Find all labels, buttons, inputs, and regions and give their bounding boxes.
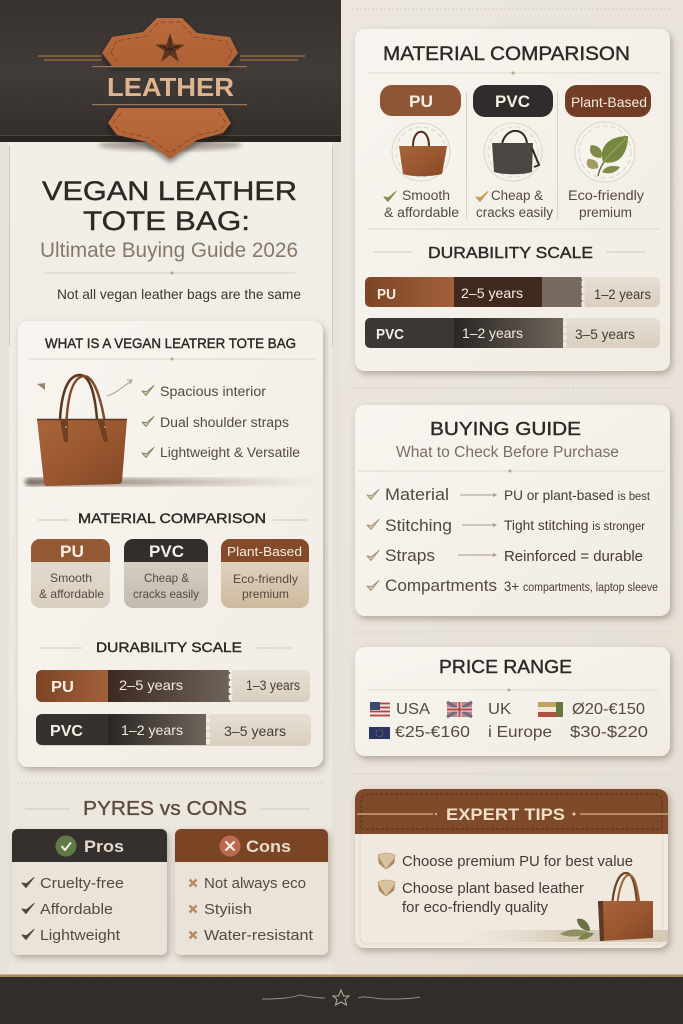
- icon: UK flag: [447, 702, 472, 717]
- icon: small tote bag: [598, 873, 653, 941]
- subheading: What to Check Before Purchase: [396, 444, 619, 461]
- tips header: [355, 789, 668, 834]
- footer ornament: [262, 990, 420, 1005]
- bar: PU durability: PU: [51, 679, 74, 696]
- icon: shield 1: [378, 853, 395, 869]
- feature list: Lightweight & Versatile: [160, 445, 300, 460]
- heading: PRICE RANGE: [439, 657, 572, 677]
- row: compartments: Compartments: [385, 577, 497, 595]
- heading: BUYING GUIDE: [430, 418, 581, 439]
- icon: red cross: [220, 836, 240, 856]
- bar: PU durability: 2–5 years: [119, 677, 183, 693]
- tip text 2: [402, 881, 584, 916]
- panel: price range: i Europe: [488, 724, 552, 741]
- card: PU: PU: [60, 543, 84, 561]
- PU description: Smooth: [402, 188, 450, 203]
- cons list: Water-resistant: [204, 927, 314, 944]
- tagline: Not all vegan leather bags are the same: [57, 286, 301, 302]
- PU description: [384, 188, 459, 220]
- panel: price range: USA: [396, 701, 430, 718]
- card: PU: Smooth: [50, 571, 92, 585]
- bar: PVC durability: PVC: [50, 723, 83, 740]
- row: compartments: compartments, laptop sleeve: [523, 582, 658, 594]
- row: stitching: Tight stitching is stronger: [504, 517, 645, 533]
- panel: price range: $30-$220: [570, 724, 648, 741]
- row: material: [367, 486, 651, 504]
- tip text 1: Choose premium PU for best value: [402, 854, 633, 870]
- bar: PVC durability: 3–5 years: [224, 723, 286, 739]
- row: compartments: 3+: [504, 578, 519, 594]
- row: stitching: Stitching: [385, 517, 452, 535]
- bar: PVC durability: 3–5 years: [575, 326, 635, 342]
- tips header: EXPERT TIPS: [446, 806, 565, 824]
- pill: PVC: PVC: [495, 92, 530, 111]
- panel: what is a vegan leather tote bag: [18, 321, 323, 767]
- panel: price range: UK: [488, 701, 511, 718]
- panel: price range: €25-€160: [395, 724, 470, 741]
- bar: PVC durability: 1–2 years: [121, 722, 183, 738]
- pros list: Lightweight: [40, 927, 121, 944]
- card: PU: [31, 539, 110, 608]
- row: material: PU or plant-based is best: [504, 487, 651, 503]
- card: PVC: Cheap &: [144, 571, 189, 585]
- panel: buying guide: [355, 405, 670, 616]
- panel: cons: Cons: [246, 837, 291, 856]
- card: plant-based: Eco-friendly: [233, 572, 298, 586]
- icon: striped flag: [538, 702, 563, 717]
- icon: leaf in circle: [575, 122, 635, 182]
- panel: pros: Pros: [84, 837, 124, 856]
- plant-based description: premium: [579, 205, 632, 220]
- pros list: [22, 875, 124, 944]
- cons list: [190, 875, 314, 944]
- pill: plant-based: [565, 85, 651, 117]
- title: [42, 176, 297, 236]
- panel: pros: [12, 829, 167, 955]
- row: stitching: [367, 517, 645, 535]
- PVC description: cracks easily: [476, 205, 553, 220]
- heading: durability scale: DURABILITY SCALE: [428, 245, 593, 262]
- panel: expert tips: [355, 789, 668, 948]
- bar: PU durability: 1–2 years: [594, 286, 651, 302]
- card: PVC: cracks easily: [133, 587, 199, 601]
- card: PVC: PVC: [149, 543, 184, 561]
- panel: price range: Ø20-€150: [572, 701, 645, 718]
- feature list: Spacious interior: [160, 384, 267, 399]
- card: plant-based: [221, 539, 309, 608]
- heading: what is: WHAT IS A VEGAN LEATRER TOTE BAG: [45, 336, 296, 351]
- icon: green check: [56, 836, 76, 856]
- panel: cons: [175, 829, 328, 955]
- footer band: [0, 974, 683, 1024]
- heading: material comparison: MATERIAL COMPARISON: [78, 510, 266, 526]
- icon: brown bag in circle: [392, 123, 450, 181]
- heading: pyres vs cons: PYRES vs CONS: [83, 797, 247, 820]
- PVC description: [476, 188, 553, 220]
- icon: EU flag: [369, 727, 390, 739]
- pill: PU: [380, 85, 461, 116]
- bar: PU durability: [36, 667, 310, 707]
- feature list: Dual shoulder straps: [160, 415, 289, 430]
- cons list: Styiish: [204, 901, 252, 918]
- ground strip: [460, 930, 668, 942]
- icon: leaves: [560, 919, 594, 940]
- arrow to bag features: [107, 380, 132, 396]
- card: PU: & affordable: [39, 587, 104, 601]
- panel: material comparison: [355, 29, 670, 371]
- row: straps: Straps: [385, 547, 435, 565]
- icon: tote bag: [25, 375, 322, 486]
- feature list: [142, 384, 300, 460]
- plant-based description: [568, 188, 644, 220]
- header leather band: [0, 0, 341, 142]
- icon: dark bag in circle: [484, 123, 542, 181]
- bar: PVC durability: PVC: [376, 327, 404, 343]
- pill: PVC: [473, 85, 553, 117]
- row: straps: Reinforced = durable: [504, 549, 643, 565]
- pill: PU: PU: [409, 92, 433, 111]
- bar: PVC durability: [36, 711, 311, 750]
- title: TOTE BAG:: [83, 206, 250, 236]
- row: compartments: [367, 577, 658, 595]
- row: straps: [367, 547, 643, 565]
- subtitle: Ultimate Buying Guide 2026: [40, 239, 298, 262]
- cons list: Not always eco: [204, 875, 306, 892]
- tip text 2: for eco-friendly quality: [402, 900, 549, 916]
- plant-based description: Eco-friendly: [568, 188, 644, 203]
- icon: small triangle: [37, 383, 45, 390]
- bar: PU durability: 1–3 years: [246, 677, 300, 693]
- pros list: Affordable: [40, 901, 113, 918]
- card: PVC: [124, 539, 208, 608]
- PU description: & affordable: [384, 205, 459, 220]
- card: plant-based: premium: [242, 587, 289, 601]
- bar: PU durability: [365, 274, 660, 311]
- tip text 2: Choose plant based leather: [402, 881, 584, 897]
- heading: MATERIAL COMPARISON: [383, 43, 630, 65]
- bar: PVC durability: [365, 314, 660, 352]
- pros list: Cruelty-free: [40, 875, 124, 892]
- leather badge with star: LEATHER: [107, 72, 234, 102]
- row: material: Material: [385, 486, 449, 504]
- icon: USA flag: [370, 702, 390, 717]
- icon: shield 2: [378, 880, 395, 896]
- heading: durability scale: DURABILITY SCALE: [96, 639, 242, 655]
- star icon: [155, 33, 185, 62]
- bar: PU durability: PU: [377, 287, 396, 303]
- pill: plant-based: Plant-Based: [571, 94, 647, 110]
- panel: price range: [355, 647, 670, 756]
- bar: PU durability: 2–5 years: [461, 285, 523, 301]
- bar: PVC durability: 1–2 years: [462, 325, 523, 341]
- card: plant-based: Plant-Based: [227, 544, 302, 559]
- leather badge with star: [38, 18, 305, 159]
- title: VEGAN LEATHER: [42, 176, 297, 206]
- PVC description: Cheap &: [491, 188, 543, 203]
